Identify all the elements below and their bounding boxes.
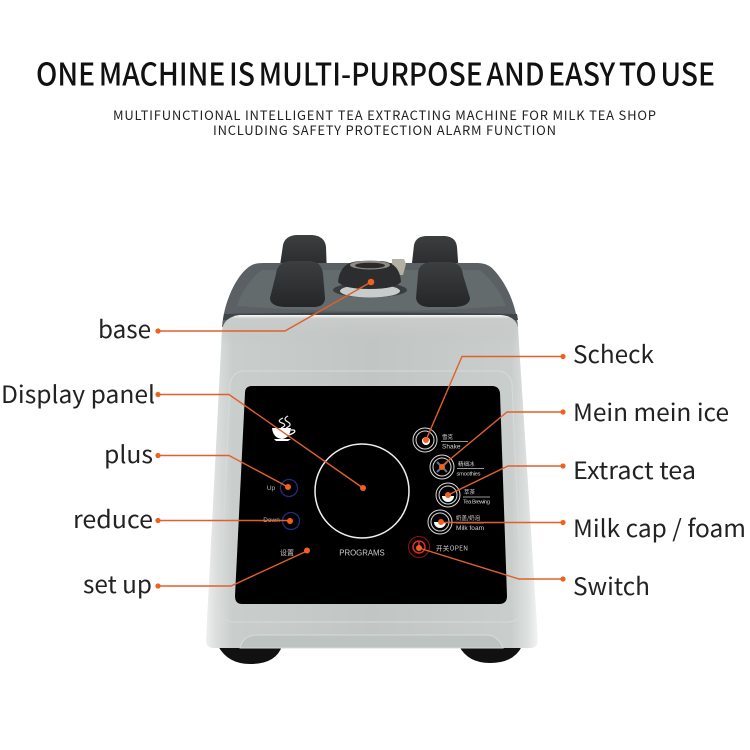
up button [267, 480, 298, 496]
callout: switch: Switch [573, 567, 650, 602]
callout: set up [83, 548, 310, 600]
body panel recess [220, 371, 522, 622]
tea brewing button: Tea Brewing [463, 500, 490, 506]
shake button: Shake [442, 444, 461, 450]
milk foam button: 奶盖/奶泡 [456, 514, 481, 522]
milk foam button [428, 510, 484, 534]
power button: 开关OPEN [436, 542, 468, 552]
callout: display panel: Display panel [1, 375, 155, 410]
callout: set up: set up [83, 565, 152, 600]
smoothies button [430, 455, 484, 479]
down button: Down [263, 517, 280, 524]
callout: plus: plus [104, 435, 153, 470]
shake button [413, 428, 468, 452]
callout: base [98, 279, 374, 345]
display panel [235, 386, 507, 604]
program dial [315, 444, 409, 538]
subtitle: INCLUDING SAFETY PROTECTION ALARM FUNCTION [213, 120, 556, 139]
callout: milk cap / foam [438, 509, 746, 544]
dark top housing [222, 263, 518, 327]
machine illustration [206, 235, 538, 664]
shake button: 雪克 [442, 433, 454, 441]
callout: scheck: Scheck [573, 335, 654, 370]
down button [263, 512, 300, 530]
callout: base: base [98, 310, 151, 345]
callout: extract tea: Extract tea [573, 451, 696, 486]
subtitle [113, 105, 656, 139]
icon: steaming cup [272, 416, 295, 441]
settings label: 设置 [280, 548, 294, 558]
callout: milk cap / foam: Milk cap / foam [573, 509, 746, 544]
callout: display panel [1, 375, 366, 491]
up button: Up [267, 485, 276, 492]
front knobs [270, 261, 470, 307]
callout: plus [104, 435, 291, 490]
programs label: PROGRAMS [339, 548, 385, 558]
callout: extract tea [445, 451, 696, 498]
power button [408, 536, 468, 558]
callout: mein mein ice: Mein mein ice [573, 393, 729, 428]
callout: mein mein ice [439, 393, 729, 470]
tea brewing button [436, 483, 490, 507]
central coupling [333, 259, 407, 298]
smoothies button: 精细冰 [458, 460, 475, 468]
panel graphics [263, 416, 490, 558]
subtitle: MULTIFUNCTIONAL INTELLIGENT TEA EXTRACTING MACHINE FOR MILK TEA SHOP [113, 105, 656, 124]
tea brewing button: 萃茶 [464, 488, 476, 496]
callout: reduce [73, 500, 293, 535]
feet [218, 646, 522, 664]
white body shell [206, 315, 538, 648]
rear knobs [279, 235, 459, 275]
milk foam button: Milk foam [456, 525, 484, 532]
callout: scheck [423, 335, 654, 443]
callout: switch [416, 545, 650, 602]
callout: reduce: reduce [73, 500, 153, 535]
smoothies button: smoothies [456, 472, 481, 478]
